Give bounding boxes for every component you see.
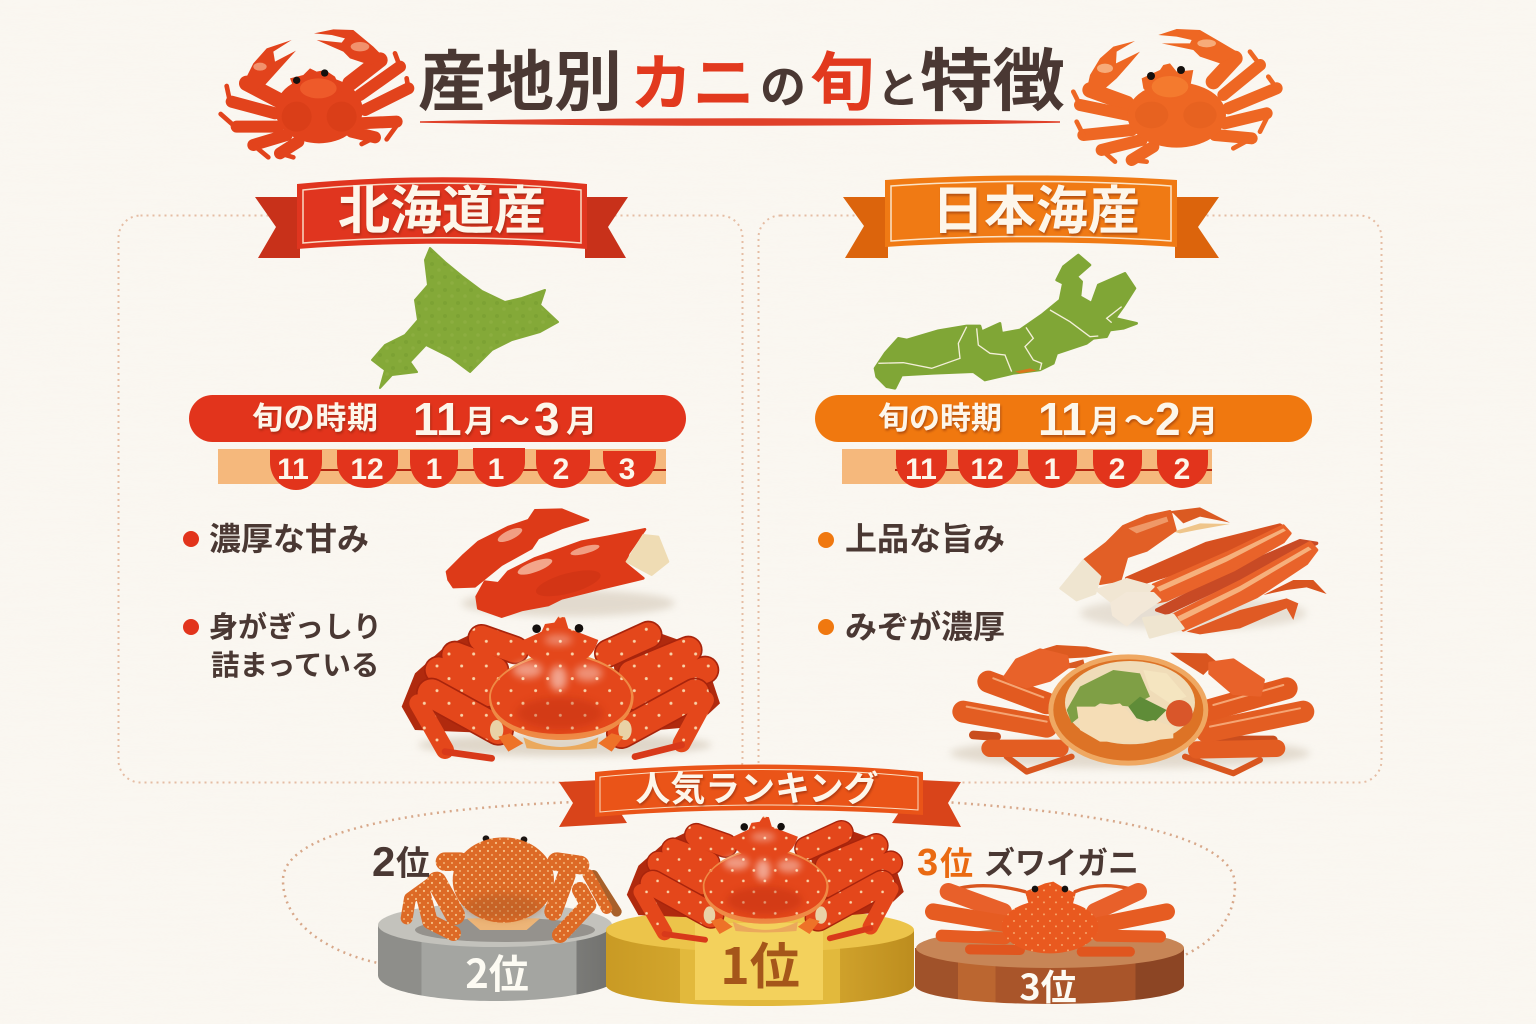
month strip Hokkaido: 1 — [426, 453, 442, 486]
feature: rich miso: みぞが濃厚 — [845, 602, 1005, 648]
month strip Sea of Japan — [842, 449, 1212, 488]
illustration: opened snow crab with miso — [950, 645, 1310, 773]
feature: refined umami: 上品な旨み — [845, 514, 1005, 560]
ranking area outline — [283, 802, 1235, 963]
month strip Hokkaido: 11 — [277, 453, 309, 486]
title: と — [877, 55, 919, 116]
pill: season Sea of Japan: 2 — [1155, 393, 1181, 445]
panel: Sea of Japan — [283, 169, 1382, 1011]
map: Honshu — [875, 255, 1137, 388]
pill: season Sea of Japan: 月 — [1187, 396, 1218, 441]
pill: season Sea of Japan — [815, 393, 1312, 445]
podium: third place: 3位 — [1019, 959, 1077, 1011]
podium: first place — [606, 908, 914, 1006]
label: third place snow crab: 位 — [940, 837, 973, 885]
label: third place snow crab: 3 — [917, 842, 938, 884]
pill: season Hokkaido: 11 — [413, 393, 462, 445]
ribbon: Sea of Japan heading — [843, 169, 1219, 258]
pill: season Sea of Japan: 旬の時期 — [878, 393, 1002, 438]
pill: season Hokkaido — [189, 393, 686, 445]
podium: second place: 2位 — [465, 942, 529, 1000]
month strip Hokkaido — [218, 448, 666, 490]
label: third place snow crab — [917, 837, 1139, 885]
ribbon: Hokkaido heading — [255, 169, 628, 258]
pill: season Hokkaido: 旬の時期 — [252, 393, 378, 438]
title: 産地別 — [418, 29, 622, 125]
label: second place — [372, 836, 430, 885]
feature: packed meat: 身がぎっしり — [209, 604, 382, 646]
pill: season Hokkaido: 3 — [534, 393, 560, 445]
month strip Sea of Japan: 2 — [1109, 453, 1125, 486]
icon: left title crab — [221, 29, 408, 157]
month strip Sea of Japan: 11 — [905, 453, 937, 486]
ribbon: Sea of Japan heading: 日本海産 — [932, 169, 1140, 244]
title: の — [760, 51, 806, 117]
podium: first place: 1位 — [720, 927, 800, 999]
pill: season Sea of Japan: 月〜 — [1089, 396, 1155, 441]
illustration: hairy king crab — [402, 617, 720, 758]
feature: packed meat — [183, 604, 382, 684]
panel: Hokkaido — [118, 169, 742, 782]
label: third place snow crab: ズワイガニ — [984, 838, 1139, 883]
pill: season Hokkaido: 月〜 — [464, 396, 530, 441]
pill: season Hokkaido: 月 — [566, 396, 597, 441]
title — [418, 26, 1065, 125]
podium: second place — [378, 903, 620, 1001]
ribbon: ranking heading: 人気ランキング — [636, 761, 878, 812]
illustration: first place king crab — [627, 816, 904, 940]
illustration: snow crab legs — [1061, 507, 1327, 637]
icon: right title crab — [1073, 29, 1277, 162]
month strip Sea of Japan: 1 — [1044, 453, 1060, 486]
title: カニ — [630, 33, 755, 123]
pill: season Sea of Japan: 11 — [1038, 393, 1087, 445]
month strip Hokkaido: 3 — [619, 453, 635, 486]
title: 特徴 — [920, 26, 1065, 125]
map: Hokkaido — [372, 248, 558, 388]
podium: third place — [915, 928, 1184, 1011]
month strip Hokkaido: 1 — [488, 453, 504, 486]
ribbon: Hokkaido heading: 北海道産 — [338, 169, 546, 244]
label: second place: 位 — [396, 836, 430, 885]
feature: rich sweetness: 濃厚な甘み — [209, 514, 369, 560]
month strip Sea of Japan: 2 — [1174, 453, 1190, 486]
illustration: king crab legs — [447, 509, 675, 617]
feature: packed meat: 詰まっている — [211, 643, 379, 684]
ribbon: ranking heading — [559, 761, 961, 827]
month strip Hokkaido: 2 — [553, 453, 569, 486]
illustration: second place hairy crab — [407, 835, 617, 935]
title: 旬 — [810, 32, 874, 124]
month strip Hokkaido: 12 — [350, 453, 384, 486]
illustration: third place snow crab — [933, 882, 1167, 953]
label: second place: 2 — [372, 838, 395, 885]
month strip Sea of Japan: 12 — [970, 453, 1004, 486]
